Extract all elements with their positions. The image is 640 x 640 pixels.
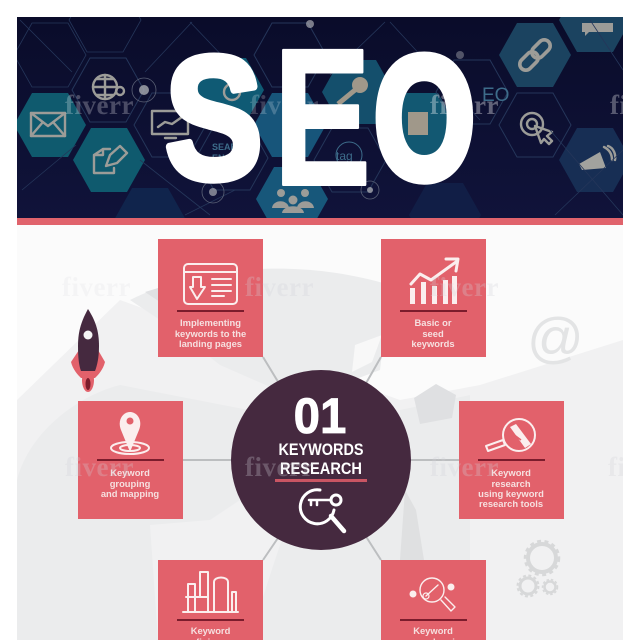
hexagons: behind the title: tag [336,149,353,163]
watermarks: body [62,272,626,482]
hexagons: behind the title: ENG [212,153,232,163]
central circle: 01 keywords research: 01 [294,389,346,444]
panel: implementing keywords: Implementing [180,317,241,328]
panel: implementing keywords [158,239,263,357]
hexagons: behind the title: EO [482,85,509,106]
icon: at sign: @ [527,306,584,369]
hexagon: speech bubble [559,17,623,52]
panel: basic or seed keywords: seed [422,328,444,339]
watermarks: header: fiverr [430,90,499,120]
icon: gears [518,541,559,596]
panel: keyword research using [381,560,486,640]
panel: basic or seed keywords: Basic or [414,317,452,328]
watermarks: body: fiverr [430,452,499,482]
title: SEO [165,8,475,226]
watermarks: body: fiverr [65,452,134,482]
panel: keyword research tools: research tools [479,498,543,509]
hexagon: link [499,23,571,87]
hexagon: envelope [14,93,86,157]
world map backdrop [17,269,470,640]
icon: magnifier with key [410,578,455,611]
icon: factory [183,572,238,612]
panel: keyword grouping: grouping [110,478,151,489]
panel: keyword research tools: Keyword [491,467,531,478]
panel: basic or seed keywords: keywords [411,338,455,349]
watermarks: header: fi [610,90,628,120]
watermarks: body: fiverr [62,272,131,302]
panel: body background [17,225,623,640]
title: SEO: E [273,8,371,226]
watermarks: header: fiverr [65,90,134,120]
icon: landing page [184,264,237,304]
icon: key in magnifier [300,490,344,531]
panel: basic or seed keywords [381,239,486,357]
central circle: 01 keywords research: RESEARCH [280,460,362,478]
watermarks: header: fiverr [250,90,319,120]
watermarks: body: fiverr [245,272,314,302]
accent stripe [17,218,623,225]
icon: growth chart [410,259,458,304]
connector lines and glows [14,0,623,215]
central circle: 01 keywords research [231,370,411,550]
panel: keyword grouping [78,401,183,519]
panel: keyword research tools [459,401,564,519]
panel: keyword grouping: Keyword [110,467,150,478]
hexagon: document and pencil [73,128,145,192]
hexagon: megaphone [559,128,623,192]
hexagon: globe and gears [72,58,144,122]
connectors: spokes [182,357,459,560]
title: SEO: O [374,20,475,215]
panel: implementing keywords: landing pages [179,338,242,349]
hexagon: people [256,167,328,218]
panel: header banner [17,17,623,218]
panel: keyword refining: Keyword [191,625,231,636]
panel: implementing keywords: keywords to the [175,328,246,339]
title: SEO: S [165,22,262,216]
panel: keyword research tools: research [491,478,531,489]
panel: keyword research using: Keyword [413,625,453,636]
hexagon: cursor target [499,93,571,157]
panel: keyword refining [158,560,263,640]
watermarks: body: fiverr [430,272,499,302]
hexagons: behind the title: SEAR [212,142,238,152]
hexagons: behind the title [116,22,508,218]
icon: map pin [111,412,149,454]
watermarks: body: fiverr [245,452,314,482]
icon: magnifier with blocks [486,419,535,451]
watermarks: header [65,90,628,120]
watermarks: body: fi [608,452,626,482]
hexagon: monitor chart [134,93,206,157]
icon: rocket [71,309,105,392]
panel: keyword research tools: using keyword [478,488,544,499]
central circle: 01 keywords research: KEYWORDS [278,441,364,459]
panel: keyword grouping: and mapping [101,488,159,499]
